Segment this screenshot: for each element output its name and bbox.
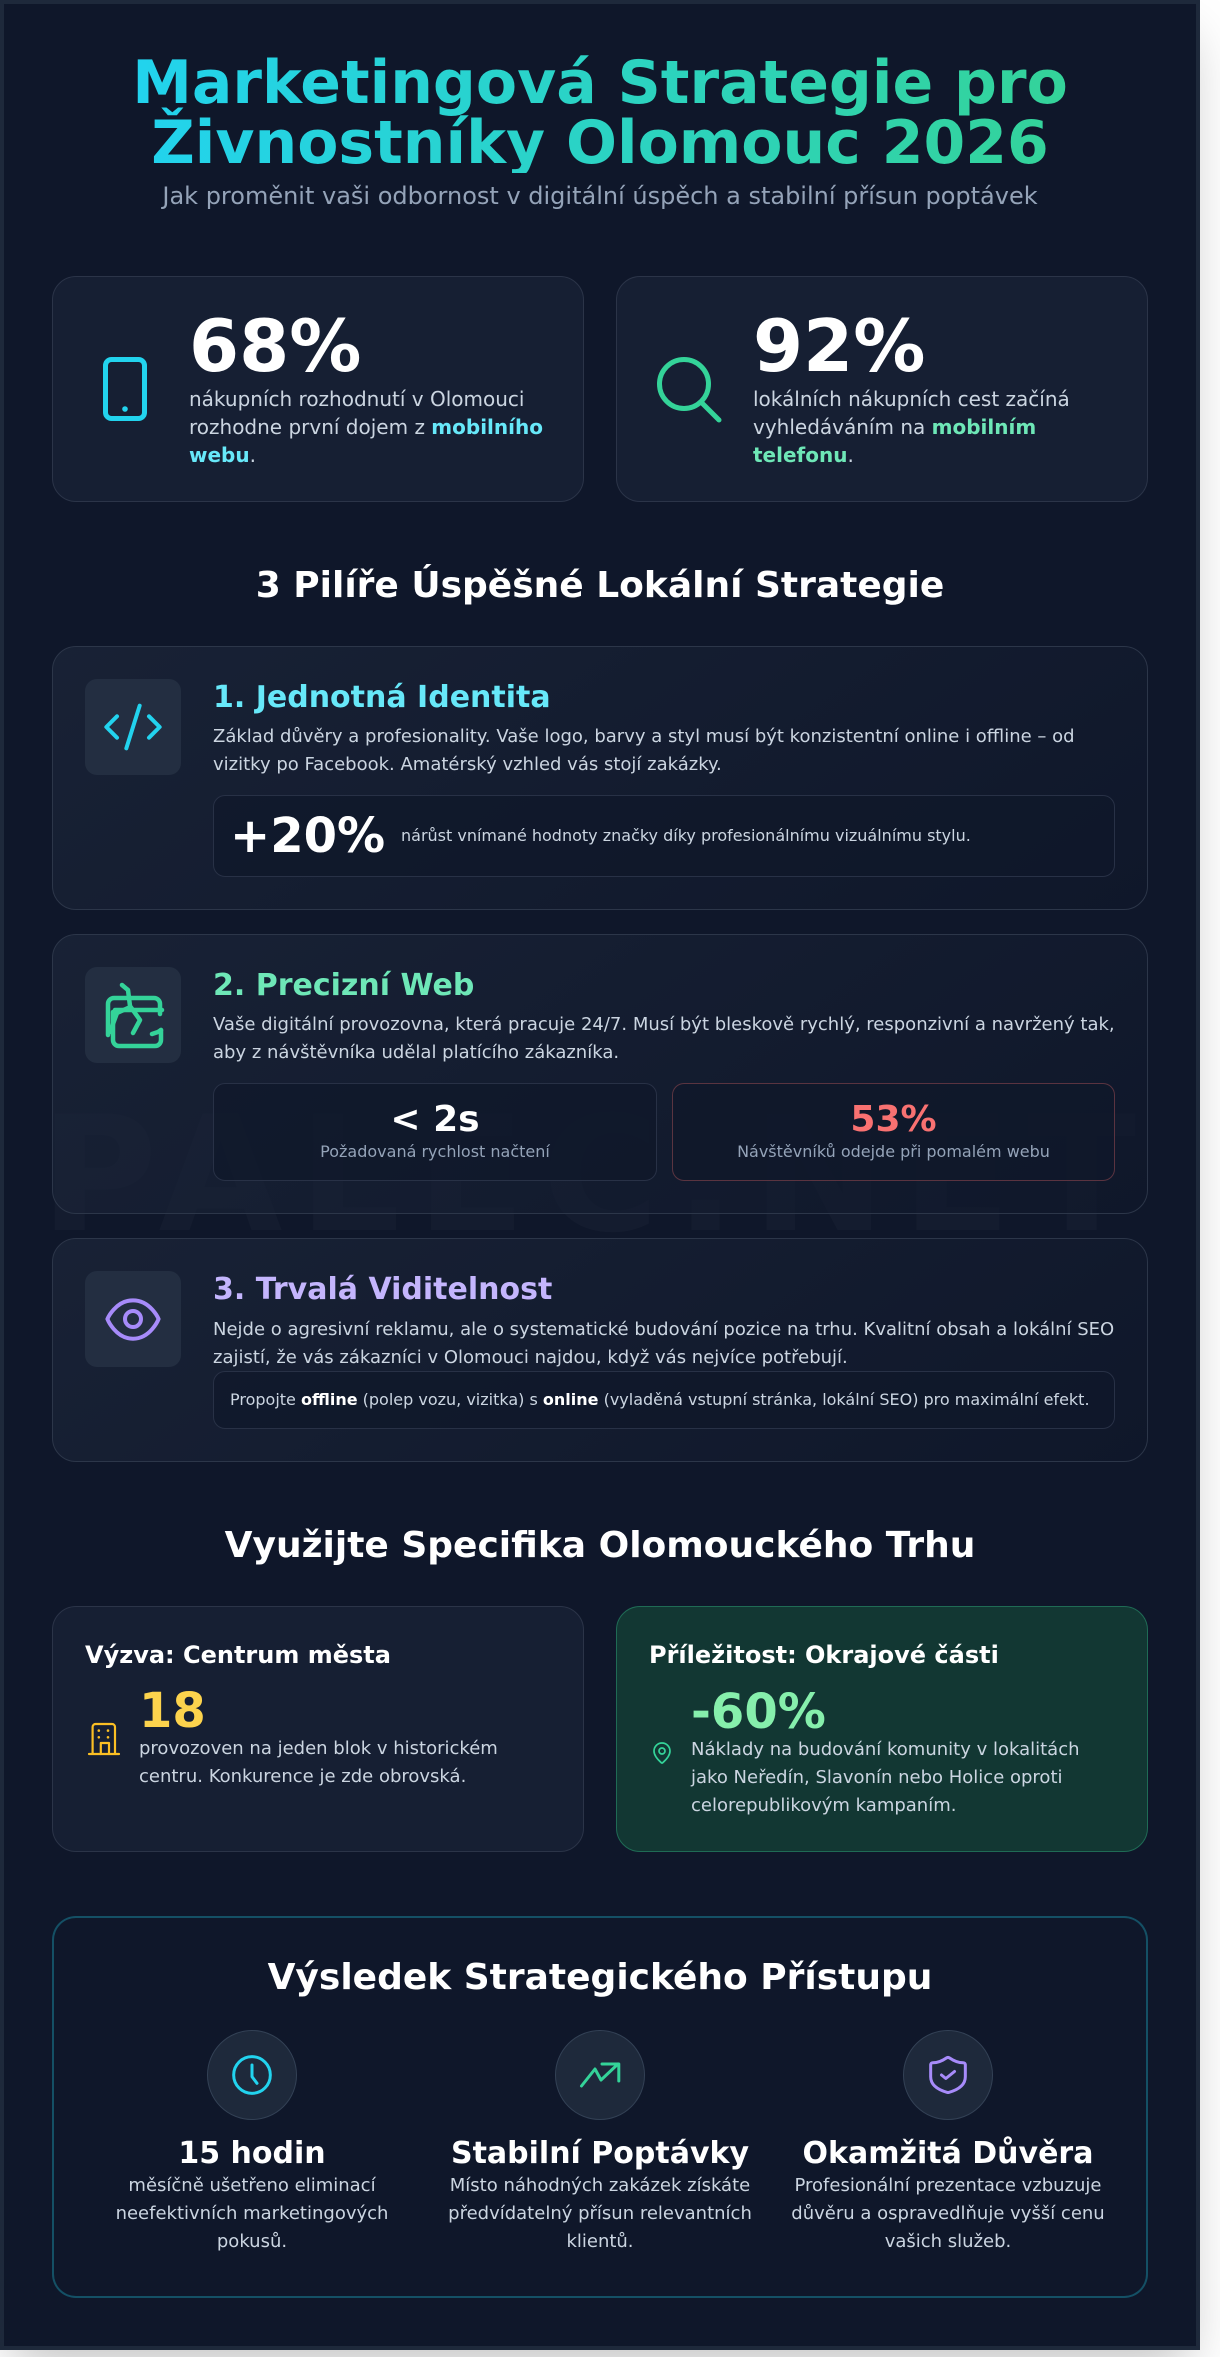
metric box: bounce bbox=[672, 1083, 1115, 1181]
result text bbox=[791, 2175, 1105, 2252]
icon: shield check bbox=[903, 2030, 993, 2120]
result text: měsíčně ušetřeno eliminací bbox=[128, 2175, 376, 2196]
result text bbox=[116, 2175, 388, 2252]
result text: Profesionální prezentace vzbuzuje bbox=[794, 2175, 1102, 2196]
result text: důvěru a ospravedlňuje vyšší cenu bbox=[791, 2203, 1105, 2224]
panel: stat 68% bbox=[52, 276, 584, 502]
pillar description: Základ důvěry a profesionality. Vaše logo, barvy a styl musí být konzistentní online i offline – od bbox=[213, 726, 1075, 747]
text: celorepublikovým kampaním. bbox=[691, 1795, 956, 1816]
subtitle: Jak proměnit vaši odbornost v digitální úspěch a stabilní přísun poptávek bbox=[162, 182, 1038, 210]
pillar description: zajistí, že vás zákazníci v Olomouci najdou, když vás nejvíce potřebují. bbox=[213, 1347, 848, 1368]
panel: results bbox=[52, 1916, 1148, 2298]
result text: Místo náhodných zakázek získáte bbox=[450, 2175, 750, 2196]
value: 18 bbox=[139, 1683, 206, 1739]
watermark: PALEC.NET bbox=[40, 1081, 1152, 1268]
panel: pillar 2 bbox=[52, 934, 1148, 1214]
result title: Okamžitá Důvěra bbox=[803, 2136, 1093, 2171]
panel title: Výzva: Centrum města bbox=[85, 1641, 391, 1669]
panel: pillar 3 bbox=[52, 1238, 1148, 1462]
result text: klientů. bbox=[566, 2231, 634, 2252]
icon: code bbox=[85, 679, 181, 775]
pillar description bbox=[213, 726, 1075, 775]
text: Náklady na budování komunity v lokalitách bbox=[691, 1739, 1080, 1760]
tip text: Propojte offline (polep vozu, vizitka) s online (vyladěná vstupní stránka, lokální SEO) pro maximální efekt. bbox=[230, 1390, 1090, 1409]
pillar description bbox=[213, 1014, 1115, 1063]
stat text: lokálních nákupních cest začíná bbox=[753, 387, 1070, 411]
metric caption: Návštěvníků odejde při pomalém webu bbox=[737, 1142, 1050, 1161]
panel title: Příležitost: Okrajové části bbox=[649, 1641, 999, 1669]
text: provozoven na jeden blok v historickém bbox=[139, 1738, 498, 1759]
stat text bbox=[189, 387, 543, 467]
stat text bbox=[753, 387, 1070, 467]
stat text: telefonu. bbox=[753, 443, 854, 467]
title: Marketingová Strategie pro bbox=[132, 48, 1068, 118]
value: -60% bbox=[691, 1684, 826, 1740]
metric value: +20% bbox=[230, 808, 385, 864]
pillar description: vizitky po Facebook. Amatérský vzhled vás stojí zakázky. bbox=[213, 754, 722, 775]
metric box: speed bbox=[213, 1083, 657, 1181]
result text bbox=[448, 2175, 752, 2252]
heading: pillars: 3 Pilíře Úspěšné Lokální Strategie bbox=[256, 565, 944, 606]
result text: předvídatelný přísun relevantních bbox=[448, 2203, 752, 2224]
text bbox=[139, 1738, 498, 1787]
icon: building bbox=[88, 1722, 120, 1756]
icon: smartphone bbox=[103, 357, 147, 421]
title bbox=[132, 53, 1068, 173]
metric caption: Požadovaná rychlost načtení bbox=[320, 1142, 550, 1161]
icon: clock bbox=[207, 2030, 297, 2120]
result text: neefektivních marketingových bbox=[116, 2203, 388, 2224]
pillar description: Nejde o agresivní reklamu, ale o systematické budování pozice na trhu. Kvalitní obsah a lokální SEO bbox=[213, 1319, 1114, 1340]
icon: trending up bbox=[555, 2030, 645, 2120]
result text: vašich služeb. bbox=[885, 2231, 1011, 2252]
panel: opportunity bbox=[616, 1606, 1148, 1852]
panel: pillar 1 bbox=[52, 646, 1148, 910]
results heading: Výsledek Strategického Přístupu bbox=[268, 1957, 932, 1998]
result title: Stabilní Poptávky bbox=[451, 2136, 749, 2171]
stat text: nákupních rozhodnutí v Olomouci bbox=[189, 387, 524, 411]
metric box bbox=[213, 795, 1115, 877]
result text: pokusů. bbox=[217, 2231, 287, 2252]
text: centru. Konkurence je zde obrovská. bbox=[139, 1766, 466, 1787]
pillar title: 3. Trvalá Viditelnost bbox=[213, 1272, 552, 1307]
metric text: nárůst vnímané hodnoty značky díky profesionálnímu vizuálnímu stylu. bbox=[401, 826, 971, 845]
metric value: < 2s bbox=[390, 1099, 480, 1140]
result title: 15 hodin bbox=[178, 2136, 326, 2171]
stat value: 68% bbox=[189, 304, 361, 388]
icon: eye bbox=[85, 1271, 181, 1367]
metric value: 53% bbox=[850, 1099, 937, 1140]
stat value: 92% bbox=[753, 304, 925, 388]
result: hours bbox=[116, 2030, 388, 2252]
text: jako Neředín, Slavonín nebo Holice oproti bbox=[691, 1767, 1063, 1788]
icon: search bbox=[657, 357, 722, 422]
title: Živnostníky Olomouc 2026 bbox=[151, 108, 1049, 178]
text bbox=[690, 1739, 1080, 1816]
tip box bbox=[213, 1371, 1115, 1429]
heading: market: Využijte Specifika Olomouckého Trhu bbox=[225, 1525, 975, 1566]
stat text: rozhodne první dojem z mobilního bbox=[189, 415, 543, 439]
result: demand bbox=[448, 2030, 752, 2252]
result: trust bbox=[791, 2030, 1105, 2252]
panel: stat 92% bbox=[616, 276, 1148, 502]
panel: challenge bbox=[52, 1606, 584, 1852]
header bbox=[132, 48, 1068, 210]
pillar description: Vaše digitální provozovna, která pracuje 24/7. Musí být bleskově rychlý, responzivní a navržený tak, bbox=[213, 1014, 1115, 1035]
pillar title: 2. Precizní Web bbox=[213, 968, 474, 1003]
pillar description bbox=[213, 1319, 1114, 1368]
pillar description: aby z návštěvníka udělal platícího zákazníka. bbox=[213, 1042, 619, 1063]
icon: map pin bbox=[653, 1742, 671, 1764]
stat text: webu. bbox=[189, 443, 256, 467]
stat text: vyhledáváním na mobilním bbox=[753, 415, 1036, 439]
icon: web bbox=[85, 967, 181, 1063]
pillar title: 1. Jednotná Identita bbox=[213, 680, 551, 715]
